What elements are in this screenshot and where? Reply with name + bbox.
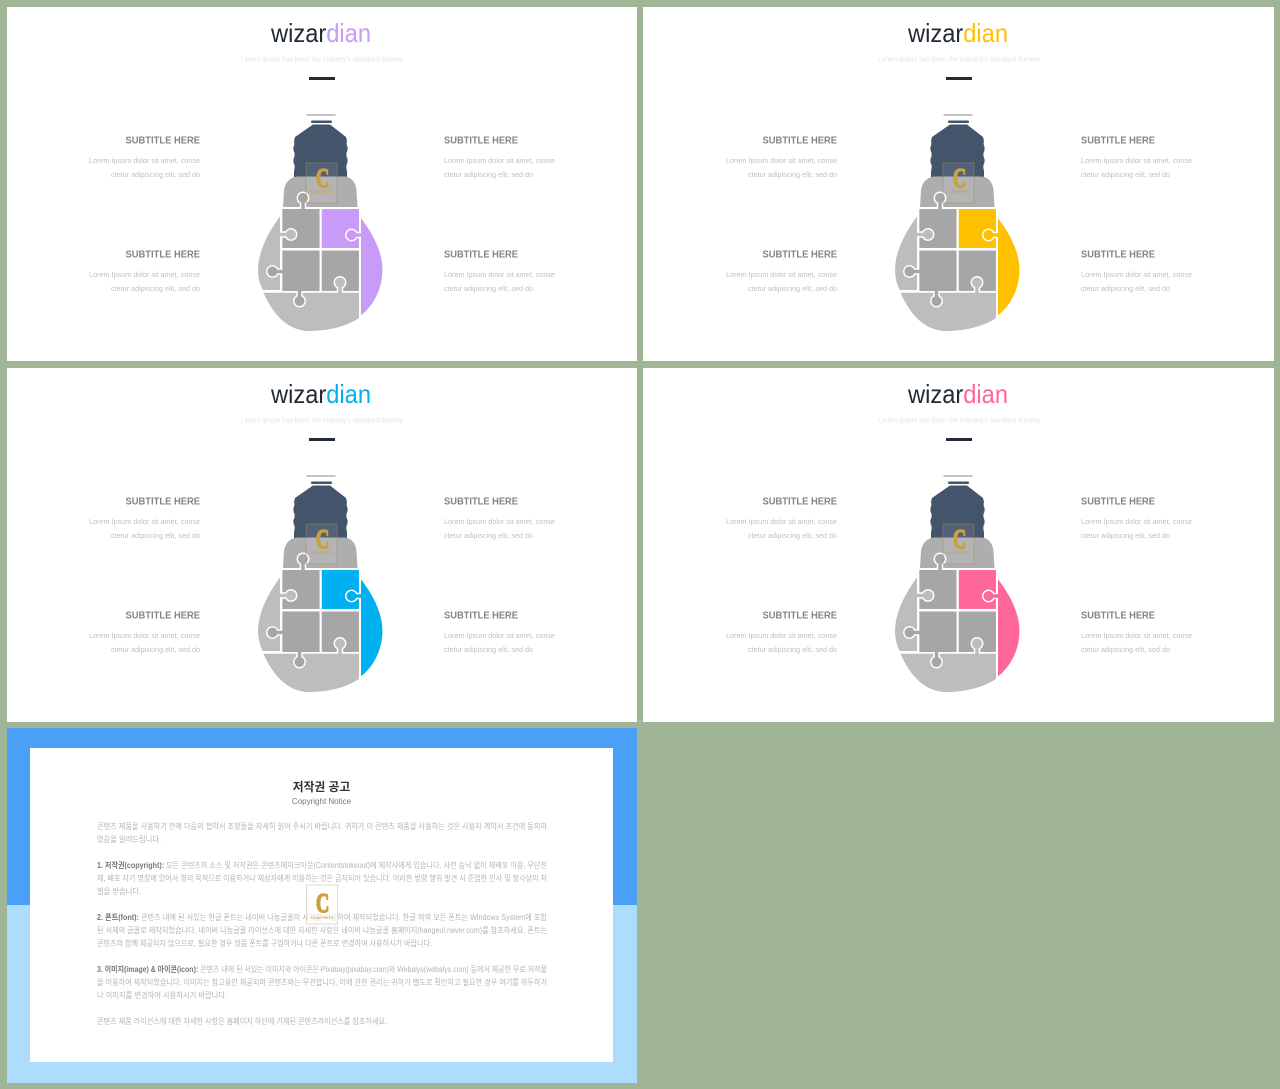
heading: 저작권 공고	[293, 780, 350, 794]
panel: blue lightbulb slide	[7, 368, 637, 722]
text block: bottom left: ctetur adipiscing elit, sed do	[748, 284, 837, 293]
text block: top right: ctetur adipiscing elit, sed do	[444, 531, 533, 540]
text block: top left	[726, 496, 837, 540]
text block: bottom right: ctetur adipiscing elit, sed do	[444, 284, 533, 293]
text block: copyright: 재, 배포 자기 명칭에 있어서 영리 목적으로 이용하거나 제삼자에게 이용하는 것은 금지되어 있습니다. 이러한 법령 행위 발견 시 준엄한 민사 및 형사상의 처	[97, 873, 547, 883]
text block: bottom left: SUBTITLE HERE	[762, 248, 837, 260]
icon: watermark	[306, 885, 338, 924]
text block: font: 콘텐츠의 함께 제공되지 않으므로, 필요한 경우 정품 폰트를 구입하거나 다른 폰트로 변경하여 사용하시기 바랍니다.	[97, 938, 432, 948]
title: wizardian	[907, 18, 1008, 48]
text block: bottom left: Lorem Ipsum dolor sit amet, conse	[89, 270, 200, 279]
text block: top left: ctetur adipiscing elit, sed do	[748, 170, 837, 179]
panel: copyright notice	[7, 728, 637, 1083]
text block: top right: Lorem Ipsum dolor sit amet, conse	[1081, 156, 1192, 165]
text block: top right: ctetur adipiscing elit, sed do	[1081, 531, 1170, 540]
text block: bottom right	[444, 248, 555, 293]
panel: yellow lightbulb slide	[643, 7, 1274, 361]
text block: license note: 콘텐츠 제품 라이선스에 대한 자세한 사항은 홈페이지 하단에 기재된 콘텐츠라이선스를 참조하세요.	[97, 1016, 387, 1026]
text block: bottom left	[726, 248, 837, 293]
text block: bottom right: SUBTITLE HERE	[1081, 610, 1155, 622]
icon: puzzle lightbulb: CONTENTS	[948, 550, 970, 555]
subtitle: Lorem Ipsum has been the industry's standard dummy	[878, 56, 1040, 64]
text block: bottom left: ctetur adipiscing elit, sed do	[111, 645, 200, 654]
text block: top right: Lorem Ipsum dolor sit amet, conse	[1081, 517, 1192, 526]
text block: top left: SUBTITLE HERE	[762, 496, 837, 508]
icon: puzzle lightbulb: C	[953, 162, 966, 193]
text block: image and icon: 3. 이미지(image) & 아이콘(icon): 콘텐츠 내에 된 서있는 이미지와 아이콘은 Pixabay(pixabay.com)와 Webalys(webalys.com) 등에서 제공한 무료 저작물	[97, 964, 547, 974]
panel: pink lightbulb slide	[643, 368, 1274, 722]
text block: bottom left: Lorem Ipsum dolor sit amet, conse	[726, 270, 837, 279]
text block: top left	[726, 134, 837, 179]
text block: bottom right	[1081, 248, 1192, 293]
text block: bottom left: ctetur adipiscing elit, sed do	[748, 645, 837, 654]
text block: bottom left: Lorem Ipsum dolor sit amet, conse	[89, 631, 200, 640]
text block: top left: SUBTITLE HERE	[762, 134, 837, 146]
text block: top left: ctetur adipiscing elit, sed do	[111, 170, 200, 179]
text block: top left	[89, 134, 200, 179]
text block: top left	[89, 496, 200, 540]
text block: top right: Lorem Ipsum dolor sit amet, conse	[444, 156, 555, 165]
text block: bottom right: ctetur adipiscing elit, sed do	[1081, 284, 1170, 293]
text block: top right: SUBTITLE HERE	[444, 134, 518, 146]
text block: top right: SUBTITLE HERE	[1081, 496, 1155, 508]
text block: intro: 콘텐츠 제품을 사용하기 전에 다음의 협약서 조항들을 자세히 읽어 주시기 바랍니다. 귀하가 이 콘텐츠 제품을 사용하는 것은 사용자 계약서 조건에 동의하	[97, 821, 548, 831]
icon: puzzle lightbulb	[257, 475, 383, 693]
text block: image and icon	[97, 964, 547, 1000]
title: wizardian	[270, 18, 371, 48]
text block: bottom right: Lorem Ipsum dolor sit amet, conse	[444, 631, 555, 640]
text block: bottom right: SUBTITLE HERE	[444, 248, 518, 260]
panel: purple lightbulb slide	[7, 7, 637, 361]
text block: bottom left: Lorem Ipsum dolor sit amet, conse	[726, 631, 837, 640]
text block: top right	[1081, 134, 1192, 179]
text block: top right: SUBTITLE HERE	[444, 496, 518, 508]
text block: bottom left	[89, 248, 200, 293]
text block: font	[97, 912, 548, 948]
text block: bottom left: SUBTITLE HERE	[762, 610, 837, 622]
text block: bottom left: ctetur adipiscing elit, sed do	[111, 284, 200, 293]
title bar	[946, 438, 972, 441]
icon: watermark: C	[316, 887, 329, 918]
text block: copyright	[97, 860, 547, 896]
icon: puzzle lightbulb: C	[316, 523, 329, 554]
text block: top right	[444, 134, 555, 179]
text block: top left: Lorem Ipsum dolor sit amet, conse	[89, 156, 200, 165]
text block: bottom left	[726, 610, 837, 654]
text block: font: 2. 폰트(font): 콘텐츠 내에 된 서있는 한글 폰트는 네이버 나눔글꼴의 서체를 이용하여 제작되었습니다. 한글 외의 보든 폰트는 Windows System에 포함	[97, 912, 548, 922]
text block: top left: ctetur adipiscing elit, sed do	[111, 531, 200, 540]
text block: top left: Lorem Ipsum dolor sit amet, conse	[89, 517, 200, 526]
text block: bottom right: Lorem Ipsum dolor sit amet, conse	[444, 270, 555, 279]
text block: intro	[97, 821, 548, 844]
text block: bottom left: SUBTITLE HERE	[126, 248, 200, 260]
subtitle: Lorem Ipsum has been the industry's standard dummy	[241, 418, 403, 424]
title bar	[309, 77, 335, 80]
icon: watermark: CONTENTS	[311, 915, 333, 920]
text block: bottom right: Lorem Ipsum dolor sit amet, conse	[1081, 631, 1192, 640]
text block: top right: ctetur adipiscing elit, sed do	[444, 170, 533, 179]
icon: puzzle lightbulb: C	[953, 523, 966, 554]
text block: bottom right: SUBTITLE HERE	[444, 610, 518, 622]
text block: bottom right: ctetur adipiscing elit, sed do	[444, 645, 533, 654]
subtitle: Lorem Ipsum has been the industry's standard dummy	[878, 418, 1040, 424]
icon: puzzle lightbulb: CONTENTS	[310, 550, 333, 555]
subtitle: Lorem Ipsum has been the industry's standard dummy	[241, 56, 403, 64]
icon: puzzle lightbulb: C	[316, 162, 329, 193]
text block: font: 된 서체의 글꼴로 제작되었습니다. 네이버 나눔글꼴 라이선스에 대한 자세한 사항은 네이버 나눔글꼴 홈페이지(hangeul.naver.com)를 참조하세요. 폰트는	[97, 925, 547, 935]
text block: top right	[444, 496, 555, 540]
title: wizardian	[907, 379, 1008, 409]
text block: top left: Lorem Ipsum dolor sit amet, conse	[726, 517, 837, 526]
text block: bottom right	[444, 610, 555, 654]
text block: copyright: 벌을 받습니다.	[97, 886, 141, 896]
text block: bottom right	[1081, 610, 1192, 654]
title: wizardian	[270, 379, 371, 409]
text block: top left: SUBTITLE HERE	[126, 134, 200, 146]
text block: top right	[1081, 496, 1192, 540]
text block: intro: 였음을 알려드립니다.	[97, 834, 161, 844]
text block: bottom left: SUBTITLE HERE	[126, 610, 200, 622]
text block: top right: Lorem Ipsum dolor sit amet, conse	[444, 517, 555, 526]
icon: puzzle lightbulb: CONTENTS	[310, 189, 333, 194]
icon: puzzle lightbulb	[894, 475, 1020, 693]
text block: top left: SUBTITLE HERE	[126, 496, 200, 508]
subheading: Copyright Notice	[292, 797, 352, 806]
icon: puzzle lightbulb: CONTENTS	[948, 189, 970, 194]
text block: bottom left	[89, 610, 200, 654]
title bar	[946, 77, 972, 80]
text block: bottom right: Lorem Ipsum dolor sit amet, conse	[1081, 270, 1192, 279]
text block: copyright: 1. 저작권(copyright): 모든 콘텐츠의 소스 및 저작권은 콘텐츠메이크아웃(Contentstokeout)에 제작사에게 있습니다. 사전 승낙 없이 재배포 이용, 무단전	[97, 860, 547, 870]
text block: bottom right: ctetur adipiscing elit, sed do	[1081, 645, 1170, 654]
text block: top right: ctetur adipiscing elit, sed do	[1081, 170, 1170, 179]
text block: image and icon: 을 이용하여 제작되었습니다. 이미지는 참고용만 제공되며 콘텐츠와는 무관합니다. 이에 관한 권리는 귀하가 별도로 확인하고 필요한 경우 여기를 위두하거	[97, 977, 547, 987]
icon: puzzle lightbulb	[257, 114, 383, 332]
title bar	[309, 438, 335, 441]
icon: puzzle lightbulb	[894, 114, 1020, 332]
text block: top left: Lorem Ipsum dolor sit amet, conse	[726, 156, 837, 165]
text block: top right: SUBTITLE HERE	[1081, 134, 1155, 146]
text block: bottom right: SUBTITLE HERE	[1081, 248, 1155, 260]
text block: image and icon: 나 이미지를 변경하여 사용하시기 바랍니다.	[97, 990, 227, 1000]
text block: top left: ctetur adipiscing elit, sed do	[748, 531, 837, 540]
